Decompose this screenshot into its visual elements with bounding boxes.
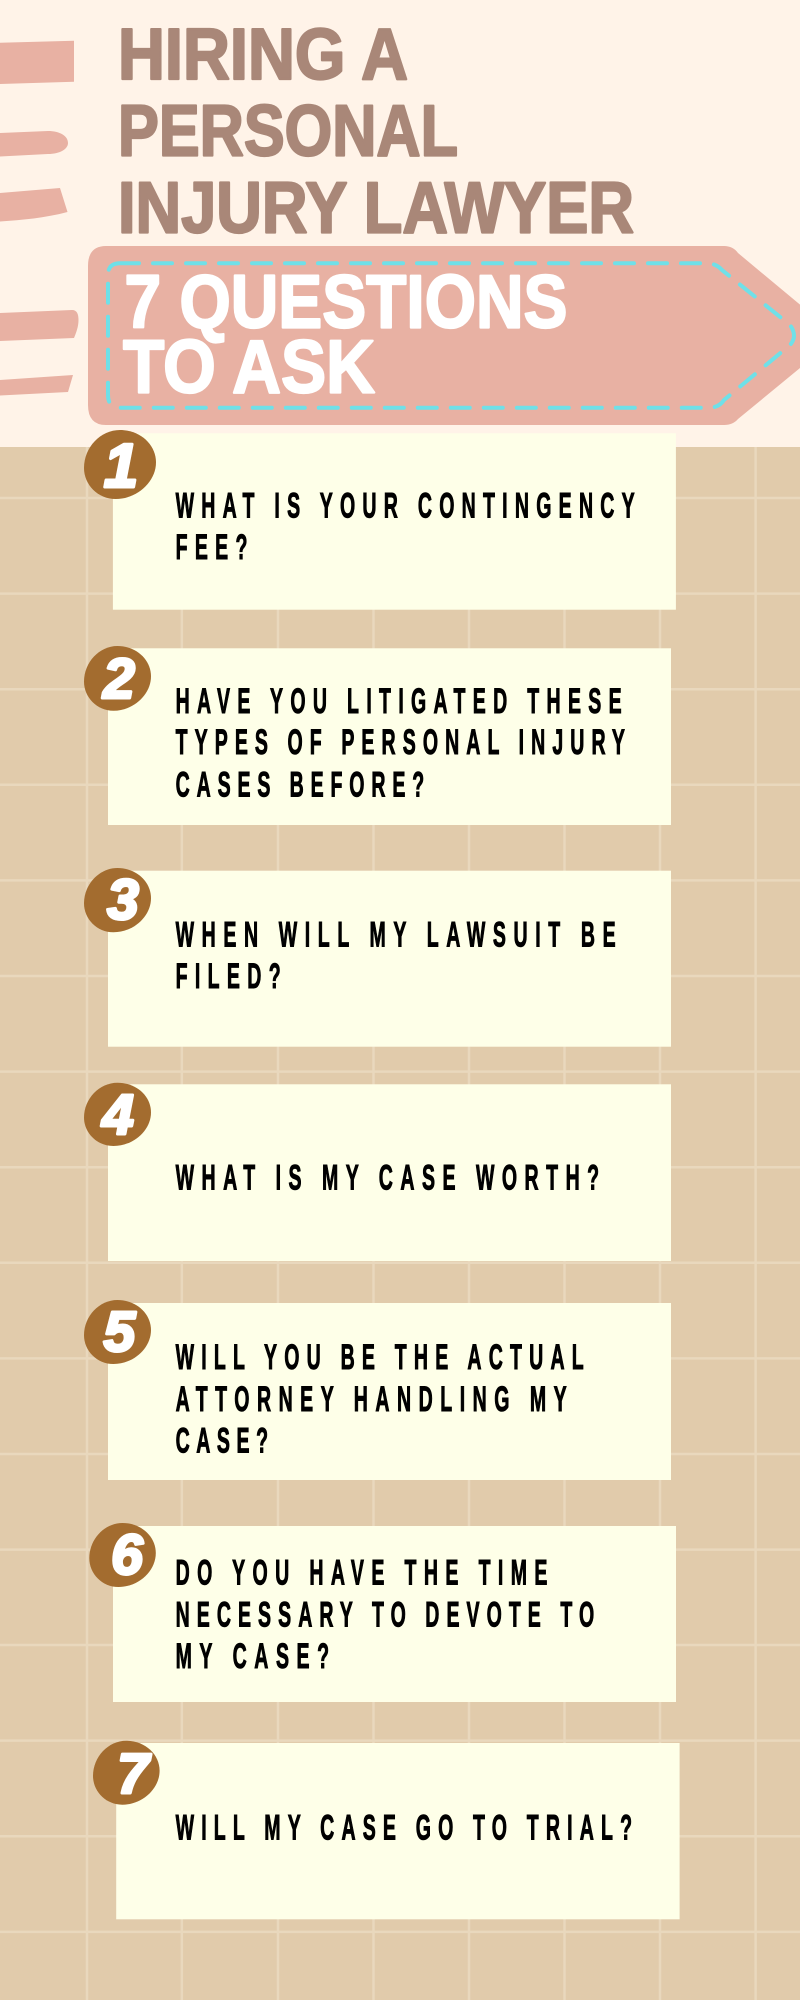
number badge 1 bbox=[84, 430, 156, 501]
question 4 text: WHAT IS MY CASE WORTH? bbox=[176, 1158, 599, 1198]
question 3 text bbox=[176, 915, 616, 997]
title: INJURY LAWYER bbox=[118, 169, 634, 249]
panel: tan grid background bbox=[0, 440, 800, 2000]
number badge 6 bbox=[89, 1523, 156, 1587]
number badge 7: 7 bbox=[117, 1742, 151, 1806]
banner text bbox=[123, 259, 568, 408]
question 6 text bbox=[176, 1554, 594, 1677]
question 6 text: DO YOU HAVE THE TIME bbox=[176, 1554, 547, 1593]
title: HIRING A bbox=[118, 15, 408, 95]
question card 5 bbox=[84, 1300, 671, 1480]
question 2 text bbox=[176, 682, 625, 805]
number badge 4 bbox=[84, 1083, 151, 1147]
question card 7 bbox=[93, 1741, 680, 1919]
question 2 text: CASES BEFORE? bbox=[176, 765, 424, 805]
banner: 7 questions to ask bbox=[88, 246, 800, 425]
banner text: 7 QUESTIONS bbox=[124, 259, 568, 343]
banner dashed outline bbox=[108, 263, 794, 408]
number badge 5 bbox=[84, 1300, 151, 1364]
number badge 3: 3 bbox=[107, 868, 139, 932]
question 1 text bbox=[176, 486, 635, 568]
question card 6 bbox=[89, 1523, 676, 1702]
banner arrow shape bbox=[88, 246, 800, 425]
question 3 text: FILED? bbox=[176, 957, 281, 997]
number badge 4: 4 bbox=[101, 1083, 134, 1147]
question 2 text: TYPES OF PERSONAL INJURY bbox=[176, 723, 625, 763]
number badge 2: 2 bbox=[102, 647, 135, 711]
number badge 1: 1 bbox=[104, 432, 138, 501]
number badge 2 bbox=[84, 646, 151, 711]
question card 4 bbox=[84, 1083, 671, 1261]
question 5 text: ATTORNEY HANDLING MY bbox=[176, 1380, 567, 1420]
question 3 text: WHEN WILL MY LAWSUIT BE bbox=[176, 915, 616, 955]
banner text: TO ASK bbox=[123, 324, 375, 408]
question 5 text bbox=[176, 1338, 584, 1461]
question card 2 bbox=[84, 646, 671, 825]
question 1 text: WHAT IS YOUR CONTINGENCY bbox=[176, 486, 635, 526]
question 1 text: FEE? bbox=[176, 528, 247, 568]
panel: cream header band bbox=[0, 0, 800, 447]
question 6 text: MY CASE? bbox=[176, 1637, 329, 1677]
question 7 text: WILL MY CASE GO TO TRIAL? bbox=[176, 1808, 632, 1848]
decorative brush strokes at left bbox=[0, 41, 78, 395]
title: PERSONAL bbox=[118, 92, 458, 172]
number badge 5: 5 bbox=[103, 1300, 136, 1364]
question 5 text: CASE? bbox=[176, 1421, 268, 1461]
question 2 text: HAVE YOU LITIGATED THESE bbox=[176, 682, 622, 722]
number badge 7 bbox=[93, 1741, 160, 1806]
question 6 text: NECESSARY TO DEVOTE TO bbox=[176, 1596, 594, 1635]
number badge 6: 6 bbox=[111, 1523, 143, 1587]
question card 1 bbox=[84, 430, 676, 610]
question card 3 bbox=[84, 868, 671, 1047]
title bbox=[118, 15, 634, 249]
question 5 text: WILL YOU BE THE ACTUAL bbox=[176, 1338, 584, 1378]
number badge 3 bbox=[84, 868, 151, 932]
